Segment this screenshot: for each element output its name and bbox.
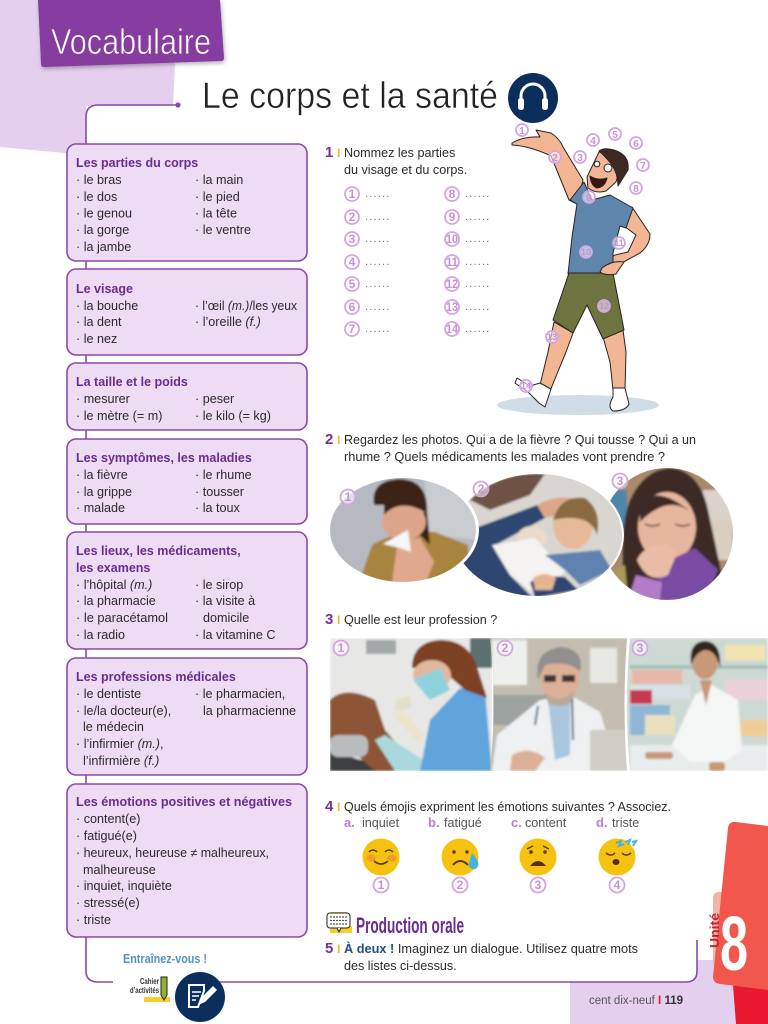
panel: La taille et le poids: · mesurer — [76, 392, 130, 406]
illustration: man with numbered body parts: 11 — [614, 238, 624, 248]
photo 3.1: dentist — [330, 638, 492, 771]
label circles on profession photos — [334, 640, 648, 656]
exercise 1 answer list: ...... — [465, 188, 491, 200]
title: Le corps et la santé — [202, 75, 498, 116]
panel: Les parties du corps: · le pied — [195, 190, 240, 204]
panel: Les lieux, les médicaments, les examens: · la vitamine C — [195, 628, 275, 642]
panel: Les symptômes, les maladies: · malade — [76, 501, 125, 515]
panel: Les émotions positives et négatives: · heureux, heureuse ≠ malheureux, — [76, 846, 269, 860]
panel: Les symptômes, les maladies: · la grippe — [76, 485, 132, 499]
exercise 1 answer list: ...... — [365, 233, 391, 245]
exercise 5 text: À deux ! Imaginez un dialogue. Utilisez quatre mots — [344, 941, 638, 956]
panel: Les lieux, les médicaments, les examens: · la pharmacie — [76, 594, 156, 608]
panel: Les lieux, les médicaments, les examens: · l’hôpital (m.) — [76, 578, 152, 592]
exercise 2 text — [325, 431, 696, 464]
exercise 1 answer list: 8 — [449, 187, 456, 201]
exercise 1 answer list: 11 — [446, 255, 458, 269]
exercise 3 text: Quelle est leur profession ? — [344, 613, 497, 627]
exercise 4 text — [325, 798, 671, 830]
emoji 1: content — [362, 838, 400, 876]
panel: La taille et le poids: La taille et le poids — [76, 375, 188, 389]
exercise 4 text: inquiet — [362, 816, 400, 830]
exercise 1 answer list: 9 — [449, 210, 456, 224]
frame line connecting the vocabulary panels — [86, 105, 697, 982]
panel: Les émotions positives et négatives: · content(e) — [76, 812, 140, 826]
exercise 1 answer list: ...... — [365, 278, 391, 290]
exercise 2 text: Regardez les photos. Qui a de la fièvre ? Qui tousse ? Qui a un — [344, 433, 696, 447]
exercise 1 answer list — [345, 187, 491, 336]
exercise 5 text: 5 — [325, 940, 333, 957]
label circles on illness photos — [340, 474, 628, 504]
exercise 3 text: I — [337, 613, 340, 627]
illustration: man with numbered body parts — [497, 124, 659, 415]
unit tab: Unité — [708, 913, 722, 948]
panel: Le visage — [67, 269, 307, 355]
panel: Les parties du corps: Les parties du corps — [76, 156, 198, 170]
exercise 1 answer list: ...... — [465, 323, 491, 335]
panel: Les symptômes, les maladies: · la toux — [195, 501, 241, 515]
page number: cent dix-neuf I 119 — [589, 995, 683, 1007]
frame dot — [175, 102, 181, 108]
exercise 1 answer list: ...... — [365, 256, 391, 268]
panel: Les professions médicales: le médecin — [83, 720, 144, 734]
panel: Les émotions positives et négatives — [67, 784, 307, 937]
heading: Production orale: Production orale — [356, 913, 464, 938]
panel: La taille et le poids: · le kilo (= kg) — [195, 409, 271, 423]
emoji 4: sleeping — [598, 838, 636, 876]
illustration: man with numbered body parts: 5 — [612, 130, 618, 141]
exercise 2 text: rhume ? Quels médicaments les malades vont prendre ? — [344, 450, 665, 464]
unit tab — [708, 822, 768, 1024]
exercise 1 answer list: 1 — [349, 187, 356, 201]
panel: La taille et le poids: · le mètre (= m) — [76, 409, 162, 423]
panel: Les parties du corps: · le ventre — [195, 223, 251, 237]
icon: headphones audio — [508, 73, 558, 123]
panel: Les symptômes, les maladies — [67, 439, 307, 524]
exercise 1 answer list: ...... — [465, 256, 491, 268]
label circles on illness photos: 3 — [617, 474, 624, 488]
label circles on profession photos: 2 — [502, 641, 509, 655]
panel: Les professions médicales — [67, 658, 307, 775]
panel: Les professions médicales: la pharmacienne — [203, 704, 296, 718]
tab: Vocabulaire — [38, 0, 224, 67]
photo 2.1: man blowing his nose — [327, 475, 480, 586]
illustration: man with numbered body parts: 10 — [581, 247, 591, 257]
exercise 4 text: c. — [511, 815, 522, 830]
exercise 5 text: I — [337, 942, 340, 956]
exercise 1 answer list: 14 — [446, 322, 458, 336]
panel: La taille et le poids — [67, 363, 307, 430]
exercise 4 text: I — [337, 800, 340, 814]
panel: Les professions médicales: · le dentiste — [76, 687, 141, 701]
panel: Les professions médicales: · l’infirmier (m.), — [76, 737, 163, 751]
callout: Entraînez-vous: Entraînez-vous ! — [123, 952, 207, 966]
background: top-left lilac shape — [0, 0, 178, 155]
exercise 1 answer list: 12 — [446, 277, 458, 291]
illustration: man with numbered body parts: 7 — [640, 161, 646, 172]
exercise 1 text — [325, 144, 467, 177]
panel: Les parties du corps: · la tête — [195, 206, 237, 220]
panel: Les parties du corps: · la jambe — [76, 240, 131, 254]
photo 2.2: child with thermometer — [464, 474, 624, 596]
illustration: man with numbered body parts: 1 — [519, 126, 525, 137]
exercise 1 answer list: 3 — [349, 232, 356, 246]
illustration: man with numbered body parts: 8 — [633, 184, 639, 195]
emoji 3: worried — [520, 838, 556, 876]
panel: Les symptômes, les maladies: · la fièvre — [76, 468, 128, 482]
background: bottom-right lilac shape — [570, 960, 740, 1024]
photo 3.2: doctor — [488, 638, 630, 771]
exercise 1 answer list: 7 — [349, 322, 356, 336]
panel: Les symptômes, les maladies: · tousser — [195, 485, 244, 499]
panel: Les parties du corps: · le genou — [76, 206, 132, 220]
exercise 1 answer list: 10 — [446, 232, 458, 246]
panel: Les parties du corps: · le dos — [76, 190, 117, 204]
panel: Les professions médicales: · le pharmacien, — [195, 687, 285, 701]
exercise 2 text: I — [337, 433, 340, 447]
panel: Les symptômes, les maladies: Les symptômes, les maladies — [76, 451, 252, 465]
exercise 5 text — [325, 940, 638, 973]
emoji number circles — [374, 878, 624, 892]
panel: Le visage: Le visage — [76, 282, 133, 296]
panel: Les professions médicales: Les professions médicales — [76, 670, 236, 684]
panel: Les lieux, les médicaments, les examens: domicile — [203, 611, 249, 625]
emoji number circles: 2 — [457, 878, 464, 892]
exercise 4 text: fatigué — [444, 816, 482, 830]
illustration: man with numbered body parts: 9 — [586, 193, 592, 204]
panel: Les parties du corps: · le bras — [76, 173, 122, 187]
callout: Entraînez-vous: d’activités — [130, 986, 159, 995]
panel: Les professions médicales: · le/la docteur(e), — [76, 704, 171, 718]
exercise 4 text: 4 — [325, 798, 334, 815]
exercise 1 answer list: ...... — [365, 323, 391, 335]
panel: Les lieux, les médicaments, les examens: les examens — [76, 561, 150, 575]
exercise 1 text: du visage et du corps. — [344, 163, 467, 177]
exercise 1 text: I — [337, 146, 340, 160]
exercise 3 text: 3 — [325, 611, 333, 628]
exercise 1 answer list: ...... — [465, 278, 491, 290]
panel: Les professions médicales: l’infirmière (f.) — [83, 754, 159, 768]
exercise 4 text: d. — [596, 815, 608, 830]
exercise 1 answer list: ...... — [365, 301, 391, 313]
panel: Les lieux, les médicaments, les examens: · la radio — [76, 628, 125, 642]
panel: Les lieux, les médicaments, les examens: Les lieux, les médicaments, — [76, 544, 241, 558]
panel: Le visage: · le nez — [76, 332, 117, 346]
exercise 4 text: triste — [612, 816, 639, 830]
panel: Les lieux, les médicaments, les examens — [67, 532, 307, 649]
label circles on profession photos: 3 — [637, 641, 644, 655]
illustration: man with numbered body parts: 13 — [547, 332, 557, 342]
photo 2.3: woman coughing — [610, 468, 733, 600]
panel: Le visage: · la bouche — [76, 299, 138, 313]
panel: Les parties du corps: · la main — [195, 173, 243, 187]
illustration: man with numbered body parts: 14 — [521, 381, 531, 391]
exercise 5 text: des listes ci-dessus. — [344, 959, 457, 973]
panel: Les émotions positives et négatives: · triste — [76, 913, 111, 927]
exercise 1 answer list: ...... — [465, 233, 491, 245]
tab: Vocabulaire: Vocabulaire — [51, 21, 211, 62]
panel: Le visage: · la dent — [76, 315, 122, 329]
exercise 1 answer list: 6 — [349, 300, 356, 314]
exercise 1 text: Nommez les parties — [344, 146, 455, 160]
exercise 1 answer list: 4 — [349, 255, 356, 269]
exercise 4 text: Quels émojis expriment les émotions suivantes ? Associez. — [344, 800, 671, 814]
panel: Les lieux, les médicaments, les examens: · la visite à — [195, 594, 255, 608]
callout: Entraînez-vous: Cahier — [140, 977, 159, 986]
unit tab: 8 — [720, 901, 748, 987]
emoji number circles: 1 — [378, 878, 385, 892]
label circles on illness photos: 2 — [478, 482, 485, 496]
illustration: man with numbered body parts: 6 — [633, 139, 639, 150]
illustration: man with numbered body parts: 4 — [590, 136, 596, 147]
panel: Les lieux, les médicaments, les examens: · le paracétamol — [76, 611, 168, 625]
exercise 1 answer list: ...... — [465, 211, 491, 223]
exercise 2 text: 2 — [325, 431, 333, 448]
illustration: man with numbered body parts: 12 — [599, 301, 609, 311]
icon: speech bubble — [327, 912, 352, 933]
exercise 1 answer list: ...... — [365, 188, 391, 200]
panel: Les émotions positives et négatives: malheureuse — [83, 863, 156, 877]
callout: Entraînez-vous — [113, 950, 225, 1024]
panel: Le visage: · l’œil (m.)/les yeux — [195, 299, 298, 313]
exercise 1 answer list: ...... — [465, 301, 491, 313]
panel: Les symptômes, les maladies: · le rhume — [195, 468, 252, 482]
panel: La taille et le poids: · peser — [195, 392, 234, 406]
photo 3.3: pharmacist — [624, 638, 768, 771]
exercise 1 answer list: 2 — [349, 210, 356, 224]
panel: Les émotions positives et négatives: Les émotions positives et négatives — [76, 795, 292, 809]
label circles on profession photos: 1 — [338, 641, 345, 655]
label circles on illness photos: 1 — [345, 490, 352, 504]
panel: Le visage: · l’oreille (f.) — [195, 315, 261, 329]
illustration: man with numbered body parts: 3 — [577, 153, 583, 164]
illustration: man with numbered body parts: 2 — [552, 153, 558, 164]
exercise 4 text: a. — [344, 815, 355, 830]
panel: Les lieux, les médicaments, les examens: · le sirop — [195, 578, 243, 592]
emoji 2: crying — [442, 838, 478, 876]
panel: Les émotions positives et négatives: · stressé(e) — [76, 896, 140, 910]
panel: Les parties du corps: · la gorge — [76, 223, 129, 237]
exercise 1 text: 1 — [325, 144, 333, 161]
panel: Les parties du corps — [67, 144, 307, 261]
exercise 4 text: content — [525, 816, 567, 830]
panel: Les émotions positives et négatives: · fatigué(e) — [76, 829, 137, 843]
panel: Les émotions positives et négatives: · inquiet, inquiète — [76, 879, 172, 893]
exercise 1 answer list: 5 — [349, 277, 356, 291]
emoji number circles: 3 — [535, 878, 542, 892]
emoji number circles: 4 — [614, 878, 621, 892]
exercise 4 text: b. — [428, 815, 440, 830]
exercise 1 answer list: 13 — [446, 300, 458, 314]
exercise 1 answer list: ...... — [365, 211, 391, 223]
